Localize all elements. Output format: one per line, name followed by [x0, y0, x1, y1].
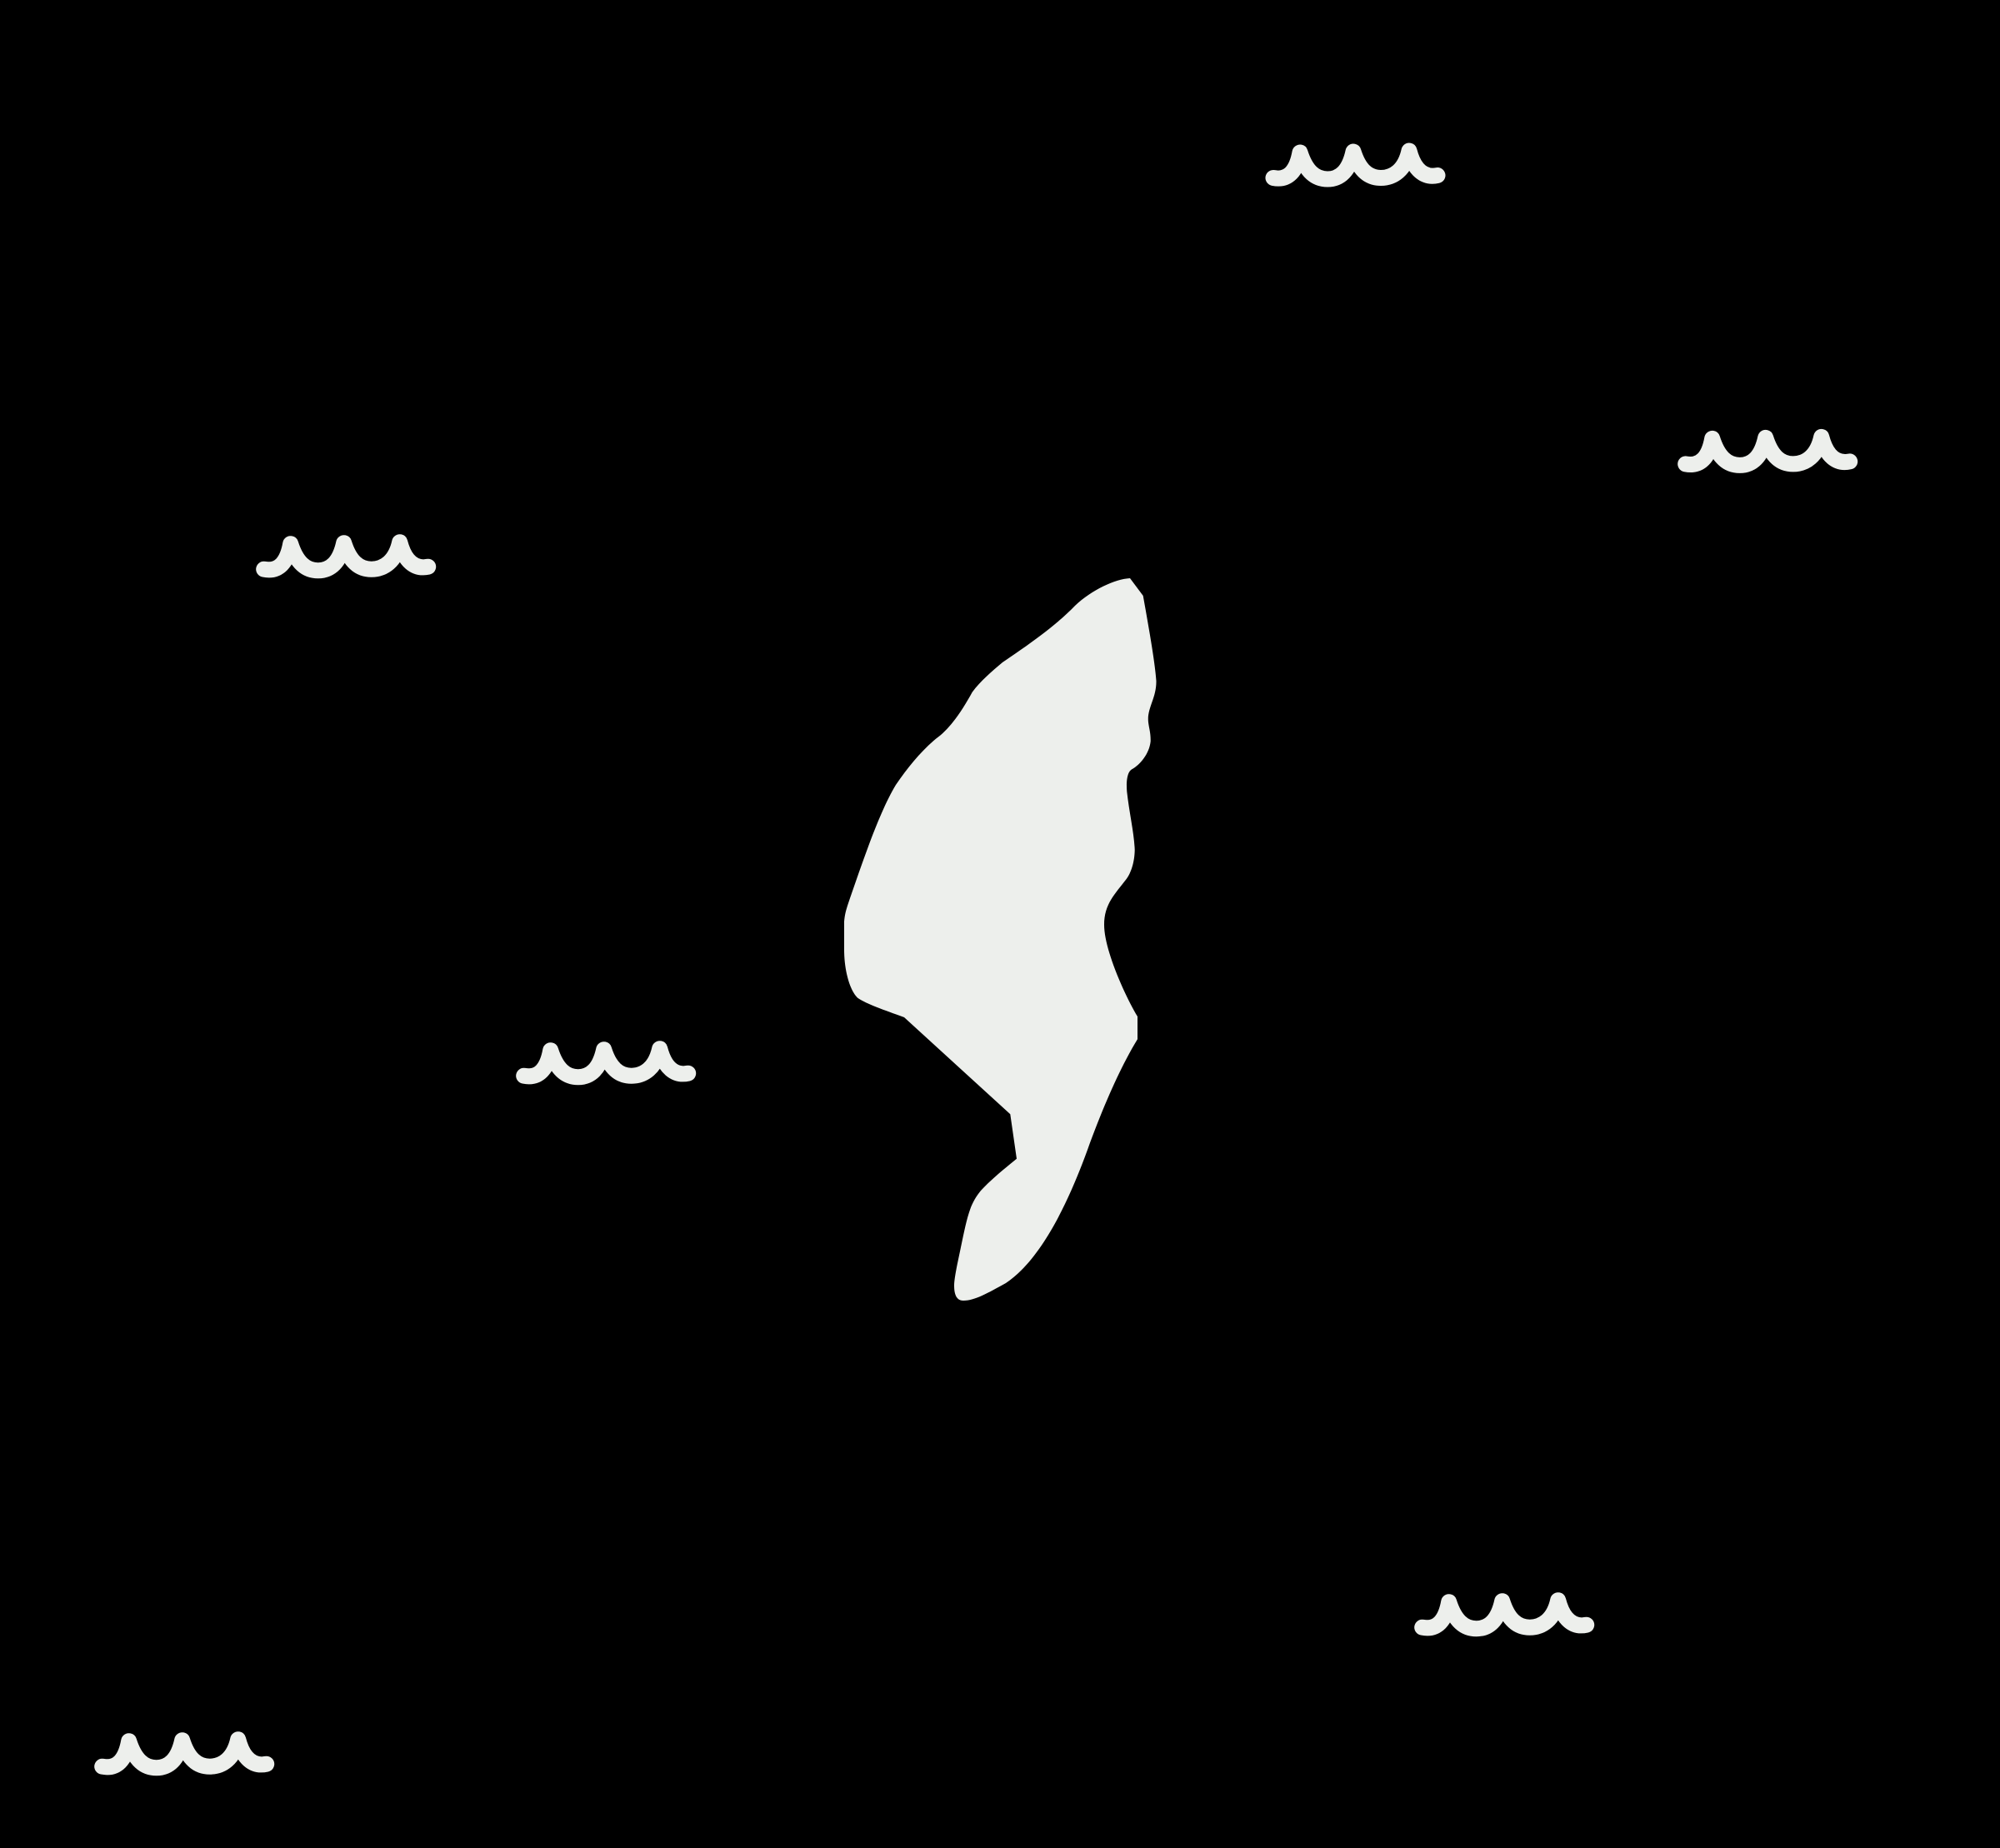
icon: wave upper left: [264, 542, 428, 571]
icon: wave right: [1686, 437, 1850, 465]
icon: wave lower right: [1422, 1601, 1587, 1629]
icon: wave centre left: [524, 1049, 688, 1077]
icon: wave top centre: [1273, 151, 1438, 179]
island shape: [844, 578, 1157, 1301]
icon: wave bottom left: [102, 1740, 267, 1768]
